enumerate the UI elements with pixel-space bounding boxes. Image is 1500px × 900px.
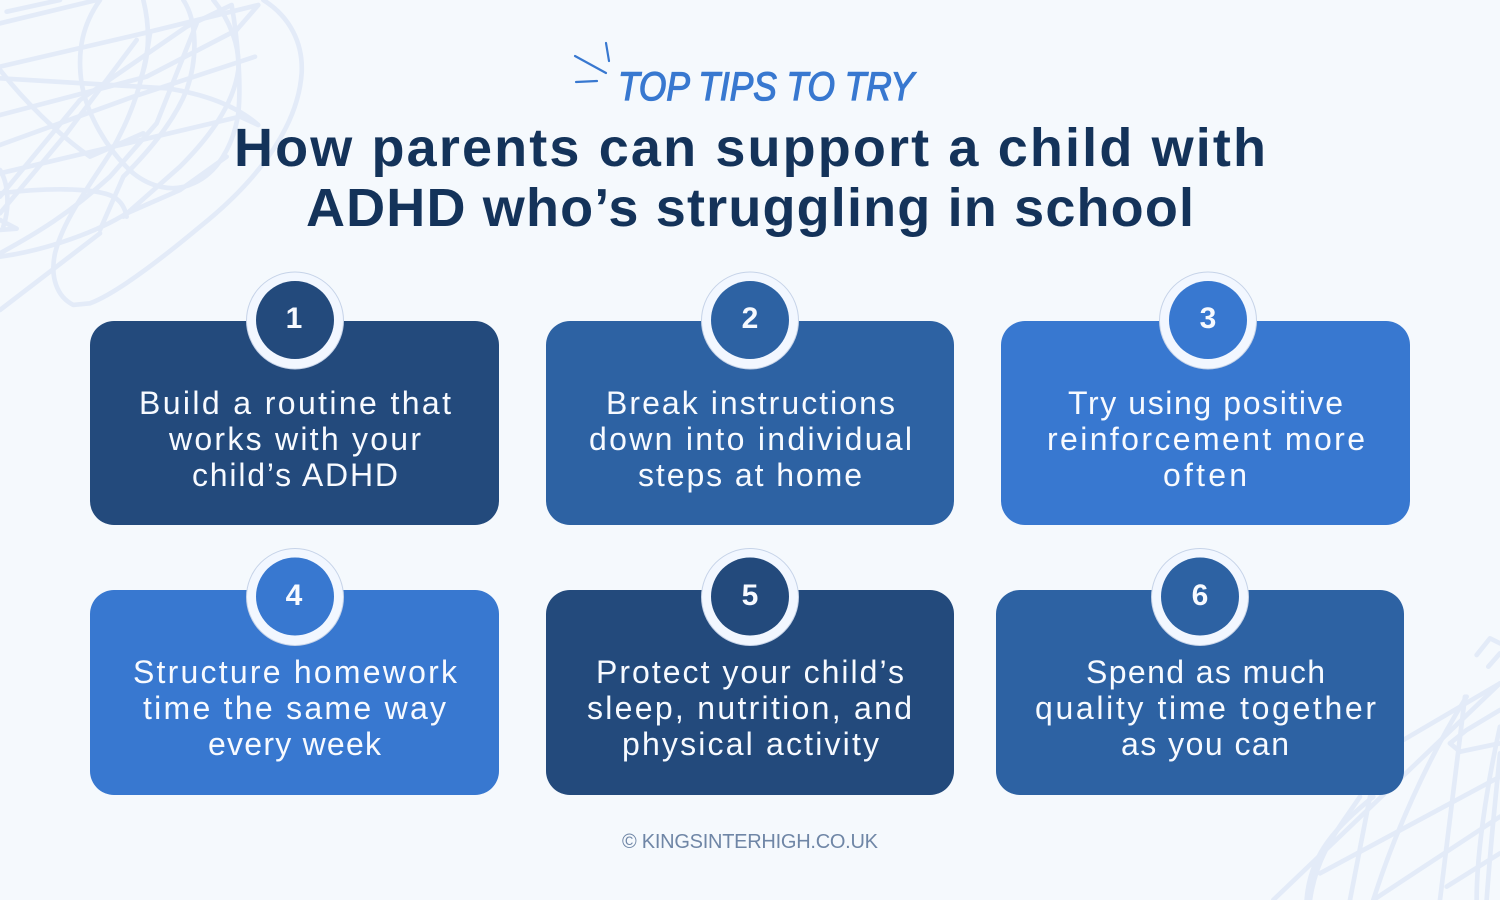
panel: tip 5: 5 [742,579,758,612]
title: How parents can support a child with [234,118,1266,178]
panel: tip 4: 4 [286,579,303,612]
panel: tip 3: reinforcement more [1047,421,1365,457]
panel: tip 4: every week [208,726,382,762]
title: ADHD who’s struggling in school [306,178,1194,238]
tagline text: TOP TIPS TO TRY [618,65,917,109]
panel: tip 2: steps at home [638,457,862,493]
panel: tip 6 [996,548,1404,795]
panel: tip 3: 3 [1200,302,1216,335]
footer credit: © KINGSINTERHIGH.CO.UK [622,831,879,853]
panel: tip 1: works with your [168,421,421,457]
panel: tip 2 [546,272,954,525]
panel: tip 4 [90,548,499,795]
panel: tip 1: 1 [286,302,302,335]
panel: tip 6: as you can [1121,726,1289,762]
panel: tip 2: Break instructions [606,385,895,421]
panel: tip 4: Structure homework [133,654,458,690]
panel: tip 5: physical activity [622,726,879,762]
tagline with spark marks [575,43,917,109]
icon: spark lines [575,43,609,82]
panel: tip 5 [546,548,954,795]
panel: tip 5: Protect your child’s [596,654,904,690]
panel: tip 3: often [1163,457,1247,493]
panel: tip 6: Spend as much [1086,654,1325,690]
panel: tip 2: down into individual [589,421,912,457]
title [234,118,1266,238]
panel: tip 1 [90,272,499,525]
panel: tip 1: Build a routine that [139,385,451,421]
panel: tip 6: quality time together [1035,690,1376,726]
panel: tip 5: sleep, nutrition, and [587,690,912,726]
panel: tip 6: 6 [1192,579,1208,612]
panel: tip 4: time the same way [143,690,446,726]
panel: tip 3 [1001,272,1410,525]
panel: tip 2: 2 [742,302,758,335]
panel: tip 3: Try using positive [1068,385,1343,421]
panel: tip 1: child’s ADHD [192,457,398,493]
